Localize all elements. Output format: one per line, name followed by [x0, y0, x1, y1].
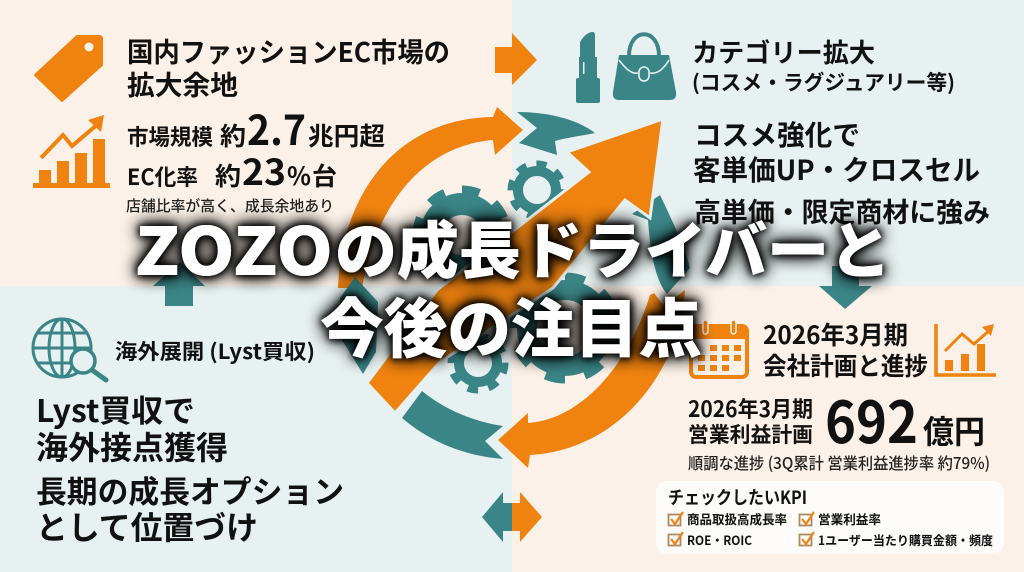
metric: operating profit plan	[688, 376, 985, 460]
metric: EC ratio: EC化率	[127, 160, 198, 192]
metric: EC ratio: 約	[215, 157, 241, 193]
card: KPI checklist: チェックしたいKPI	[668, 484, 807, 510]
arrow: orange arc bottom-right	[498, 290, 685, 468]
gear: upper large	[418, 191, 506, 279]
panel: category expansion	[576, 32, 990, 230]
KPI labels: 商品取扱高成長率	[687, 509, 787, 528]
arrow: large orange growth arrow	[367, 119, 663, 413]
gear: lower small	[451, 336, 505, 390]
title: 今後の注目点	[320, 279, 702, 371]
metric: operating profit plan: 2026年3月期	[688, 392, 813, 424]
checkboxes	[668, 512, 814, 546]
icon: lipstick	[576, 32, 600, 103]
arrow: orange arc top-left	[338, 107, 523, 288]
body text	[36, 386, 344, 549]
central cycle diagram	[153, 33, 872, 542]
heading: カテゴリー拡大	[692, 33, 875, 70]
icon: handbag	[613, 34, 676, 100]
heading	[127, 31, 450, 103]
arrow: teal arc left	[340, 277, 378, 374]
heading: (コスメ・ラグジュアリー等)	[692, 67, 955, 97]
heading: 国内ファッションEC市場の	[127, 31, 450, 70]
body text: 客単価UP・クロスセル	[693, 149, 980, 189]
title: の成長ドライバーと	[335, 201, 891, 291]
heading: 海外展開 (Lyst買収)	[115, 336, 315, 366]
arrow: teal arc right	[632, 195, 690, 294]
KPI labels: 営業利益率	[818, 509, 881, 528]
metric: market size: 約	[220, 117, 246, 153]
body text: Lyst買収で	[36, 386, 195, 431]
KPI labels: 1ユーザー当たり購買金額・頻度	[818, 530, 993, 549]
panel: FY plan and progress	[656, 316, 1004, 554]
panel: domestic EC market	[33, 31, 450, 216]
body text: 高単価・限定商材に強み	[694, 191, 990, 230]
note: 店舗比率が高く、成長余地あり	[126, 195, 334, 216]
gear: lower large	[515, 278, 615, 378]
metric: EC ratio: %	[287, 157, 311, 193]
icon: progress chart	[936, 324, 996, 375]
heading: 拡大余地	[127, 64, 238, 103]
metric: market size: 市場規模	[127, 120, 213, 152]
arrow: bottom double	[482, 492, 542, 542]
arrow: teal down right	[819, 266, 872, 309]
icon: rising bar chart	[33, 115, 110, 188]
metric: operating profit plan: 692	[825, 376, 918, 460]
metric: operating profit plan: 億円	[923, 407, 985, 453]
card: KPI checklist	[656, 481, 1004, 554]
title	[135, 199, 891, 371]
progress note: 順調な進捗 (3Q累計 営業利益進捗率 約79%)	[688, 450, 990, 474]
metric: EC ratio	[127, 144, 337, 196]
heading	[692, 33, 955, 97]
metric: market size: 2.7	[247, 97, 306, 157]
panel: overseas expansion	[33, 319, 344, 549]
body text: として位置づけ	[36, 503, 258, 549]
title: ZOZO	[135, 199, 333, 295]
gear: upper small	[511, 164, 563, 216]
body text: コスメ強化で	[694, 114, 860, 154]
heading	[763, 316, 928, 383]
heading: 会社計画と進捗	[763, 347, 928, 383]
metric: operating profit plan: 営業利益計画	[688, 419, 813, 449]
metric: market size	[127, 97, 385, 157]
KPI labels: ROE・ROIC	[687, 530, 752, 549]
heading: 2026年3月期	[763, 316, 908, 352]
arrow: teal arc bottom	[402, 391, 503, 459]
metric: EC ratio: 23	[242, 144, 286, 196]
KPI labels	[687, 509, 993, 549]
icon: globe with magnifier	[33, 319, 106, 380]
arrow: teal arc top	[517, 112, 595, 155]
icon: price tag	[35, 36, 102, 101]
arrow: right orange top	[495, 33, 537, 85]
body text: 長期の成長オプション	[36, 467, 344, 512]
body text	[693, 114, 990, 230]
arrow: teal up left	[153, 262, 205, 306]
icon: calendar	[691, 320, 747, 377]
metric: EC ratio: 台	[312, 157, 337, 193]
metric: market size: 兆円超	[308, 117, 385, 153]
body text: 海外接点獲得	[36, 423, 228, 469]
